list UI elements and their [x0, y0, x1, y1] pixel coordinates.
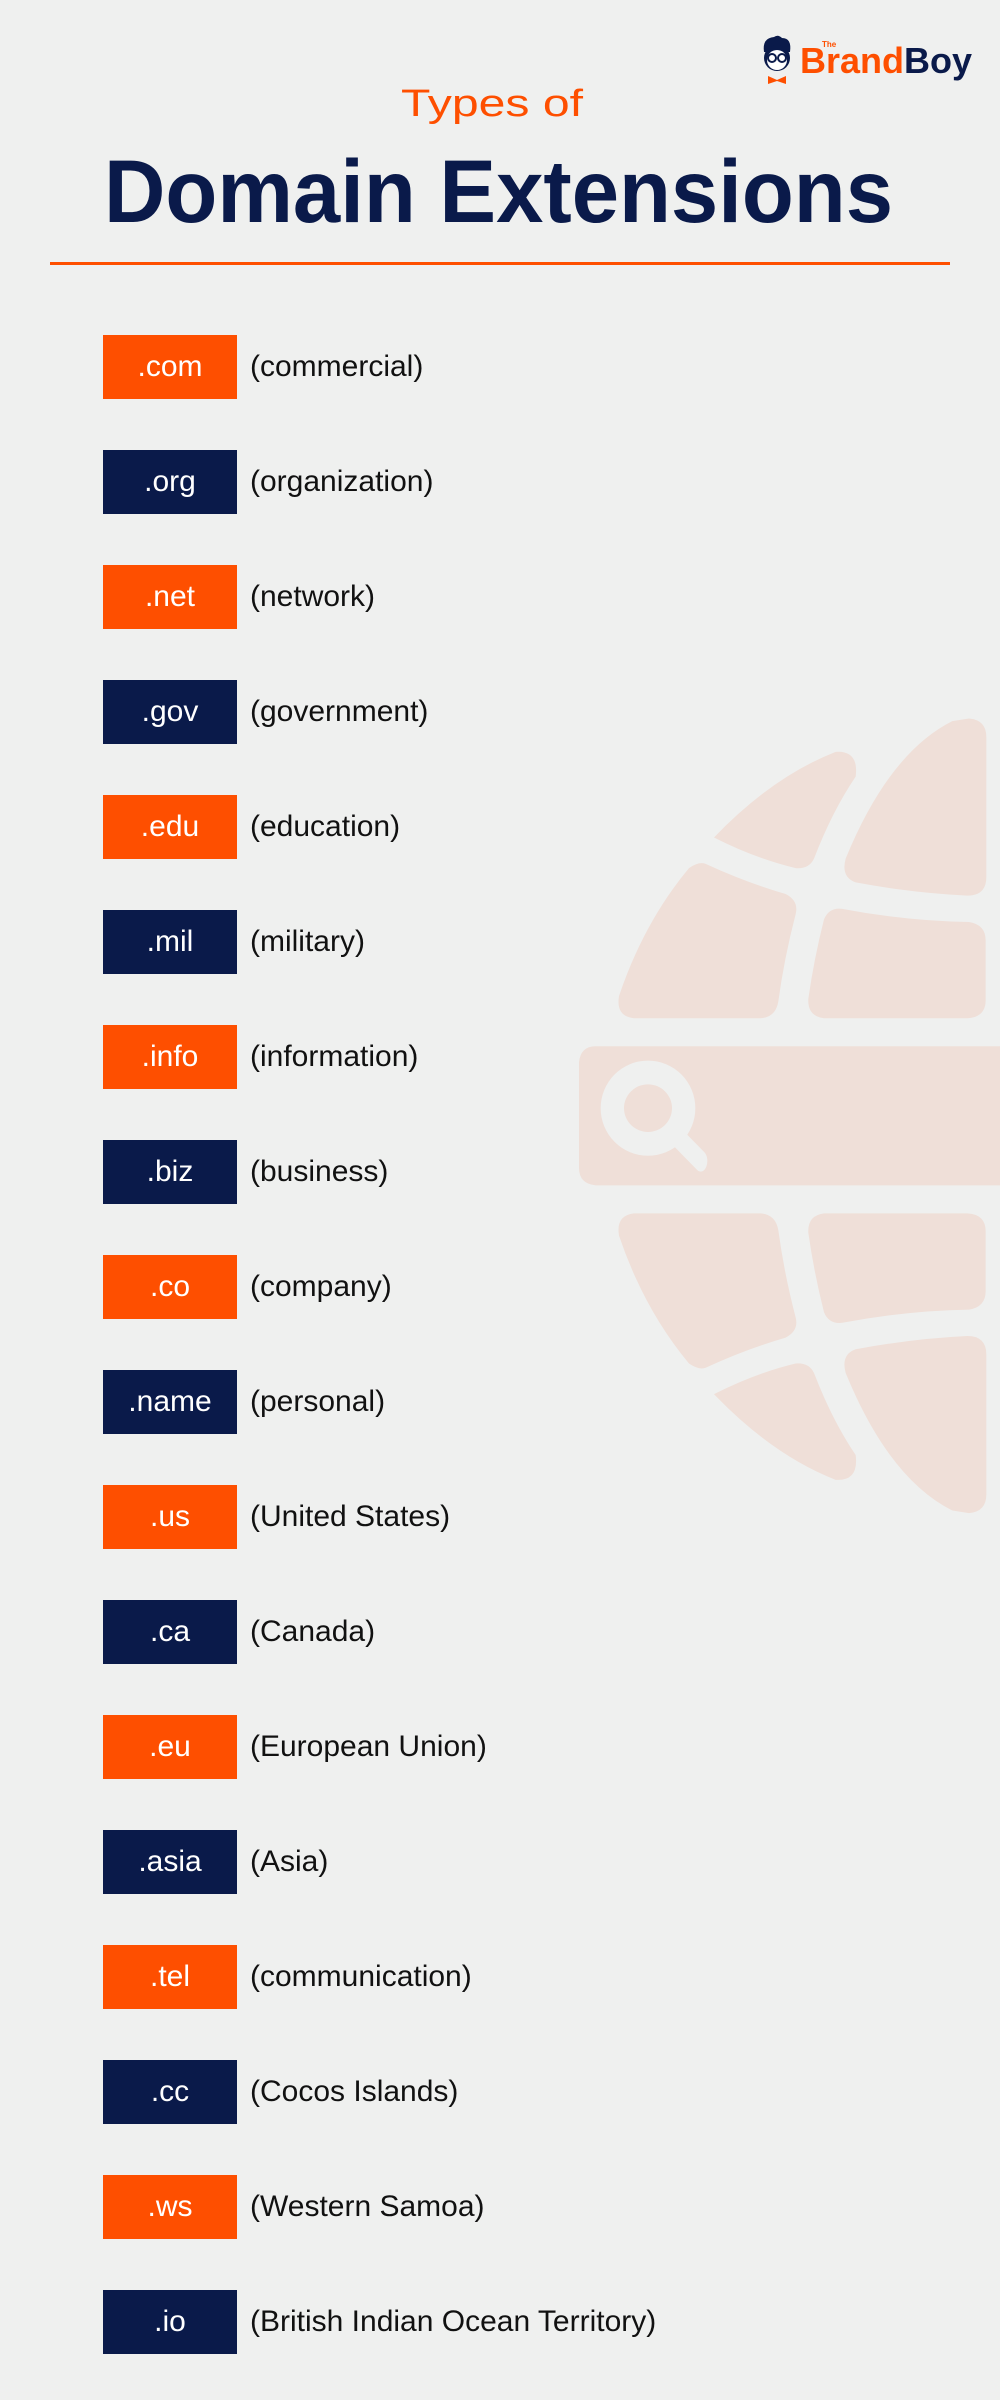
list: domain extensions: .edu: [141, 810, 199, 843]
list: domain extensions: (military): [250, 925, 365, 958]
list: domain extensions: .tel: [150, 1960, 190, 1993]
title: Domain Extensions: [104, 141, 893, 240]
list: domain extensions: (network): [250, 580, 375, 613]
list: domain extensions: .info: [142, 1040, 198, 1073]
list: domain extensions: .org: [144, 465, 196, 498]
list: domain extensions: (personal): [250, 1385, 385, 1418]
list: domain extensions: .asia: [138, 1845, 202, 1878]
list: domain extensions: (government): [250, 695, 428, 728]
list: domain extensions: .biz: [147, 1155, 193, 1188]
title: Types of: [401, 83, 584, 125]
list: domain extensions: (commercial): [250, 350, 423, 383]
list: domain extensions: (company): [250, 1270, 392, 1303]
title: [104, 83, 893, 240]
brand text: BrandBoy: [800, 40, 972, 81]
list: domain extensions: (education): [250, 810, 400, 843]
icon: boy face: [764, 36, 790, 84]
list: domain extensions: (United States): [250, 1500, 450, 1533]
list: domain extensions: (Western Samoa): [250, 2190, 485, 2223]
list: domain extensions: .ws: [148, 2190, 192, 2223]
list: domain extensions: .co: [150, 1270, 190, 1303]
list: domain extensions: .com: [137, 350, 202, 383]
list: domain extensions: .cc: [151, 2075, 189, 2108]
list: domain extensions: (communication): [250, 1960, 472, 1993]
list: domain extensions: (information): [250, 1040, 418, 1073]
list: domain extensions: (Cocos Islands): [250, 2075, 458, 2108]
logo: The BrandBoy: The: [822, 40, 836, 49]
list: domain extensions: .io: [154, 2305, 186, 2338]
list: domain extensions: .name: [128, 1385, 212, 1418]
list: domain extensions: (European Union): [250, 1730, 487, 1763]
list: domain extensions: .mil: [147, 925, 193, 958]
list: domain extensions: (British Indian Ocean Territory): [250, 2305, 656, 2338]
list: domain extensions: .eu: [149, 1730, 191, 1763]
list: domain extensions: [103, 335, 656, 2354]
list: domain extensions: .ca: [150, 1615, 190, 1648]
list: domain extensions: (Canada): [250, 1615, 375, 1648]
list: domain extensions: (Asia): [250, 1845, 328, 1878]
list: domain extensions: (business): [250, 1155, 388, 1188]
list: domain extensions: .net: [145, 580, 195, 613]
list: domain extensions: .gov: [142, 695, 198, 728]
list: domain extensions: (organization): [250, 465, 433, 498]
list: domain extensions: .us: [150, 1500, 190, 1533]
logo: The BrandBoy: [764, 36, 972, 84]
